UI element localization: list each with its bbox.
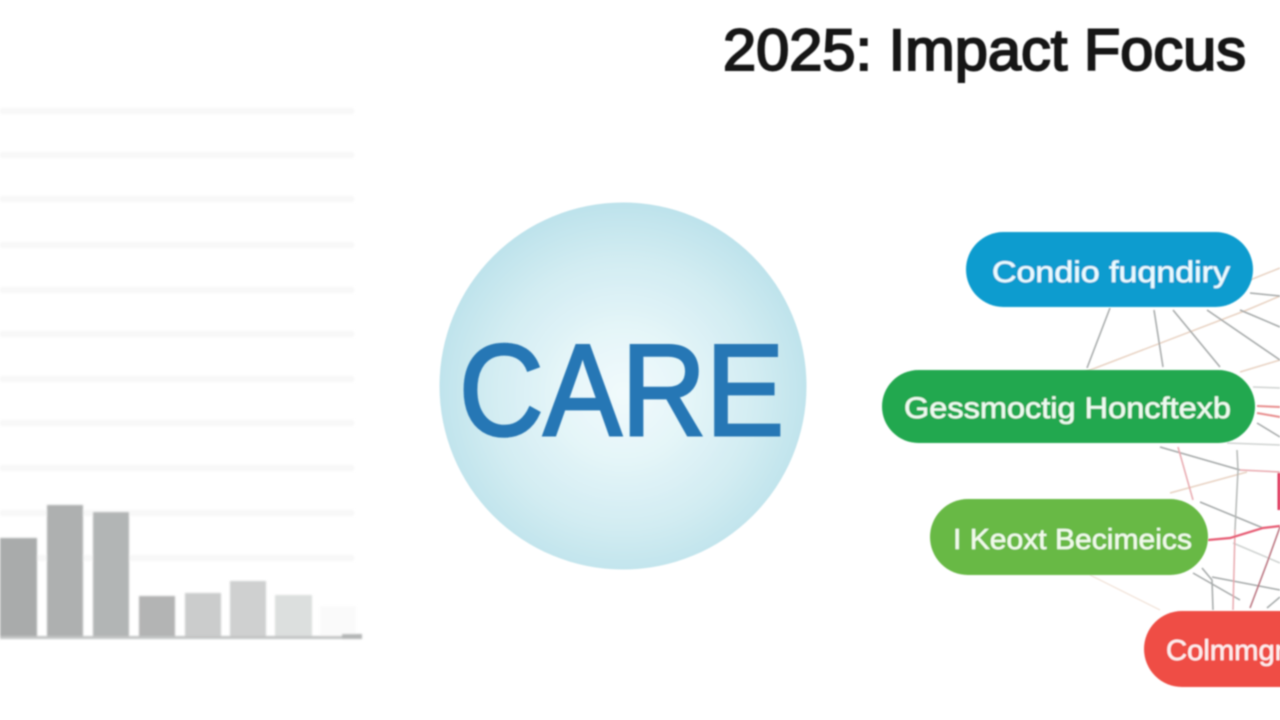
chart axis xyxy=(0,636,342,639)
bar 7 xyxy=(275,595,312,638)
bar 3 xyxy=(93,512,129,638)
pill: green xyxy=(882,370,1255,443)
axis end xyxy=(342,634,362,639)
pill: red xyxy=(1144,611,1280,687)
bar 8 xyxy=(320,606,356,638)
CARE label: CARE xyxy=(459,317,784,463)
bar 4 xyxy=(139,596,175,638)
circle xyxy=(440,202,806,570)
pill label: Gessmoctig Honcftexb xyxy=(904,392,1231,425)
bar 5 xyxy=(185,593,221,638)
connection network xyxy=(1085,268,1280,610)
bar chart xyxy=(0,111,362,638)
pill: blue xyxy=(966,232,1253,307)
bar 2 xyxy=(47,505,83,638)
pill shape xyxy=(966,232,1253,307)
pill: lime xyxy=(930,499,1208,575)
pill shape xyxy=(930,499,1208,575)
pill label: Condio fuqndiry xyxy=(992,256,1230,289)
pill label: I Keoxt Becimeics xyxy=(953,524,1192,556)
central circle: CARE xyxy=(440,202,806,570)
bar 1 xyxy=(0,538,37,638)
bar 6 xyxy=(230,581,266,638)
title: 2025: Impact Focus xyxy=(723,18,1246,83)
pill shape xyxy=(1144,611,1280,687)
pill shape xyxy=(882,370,1255,443)
